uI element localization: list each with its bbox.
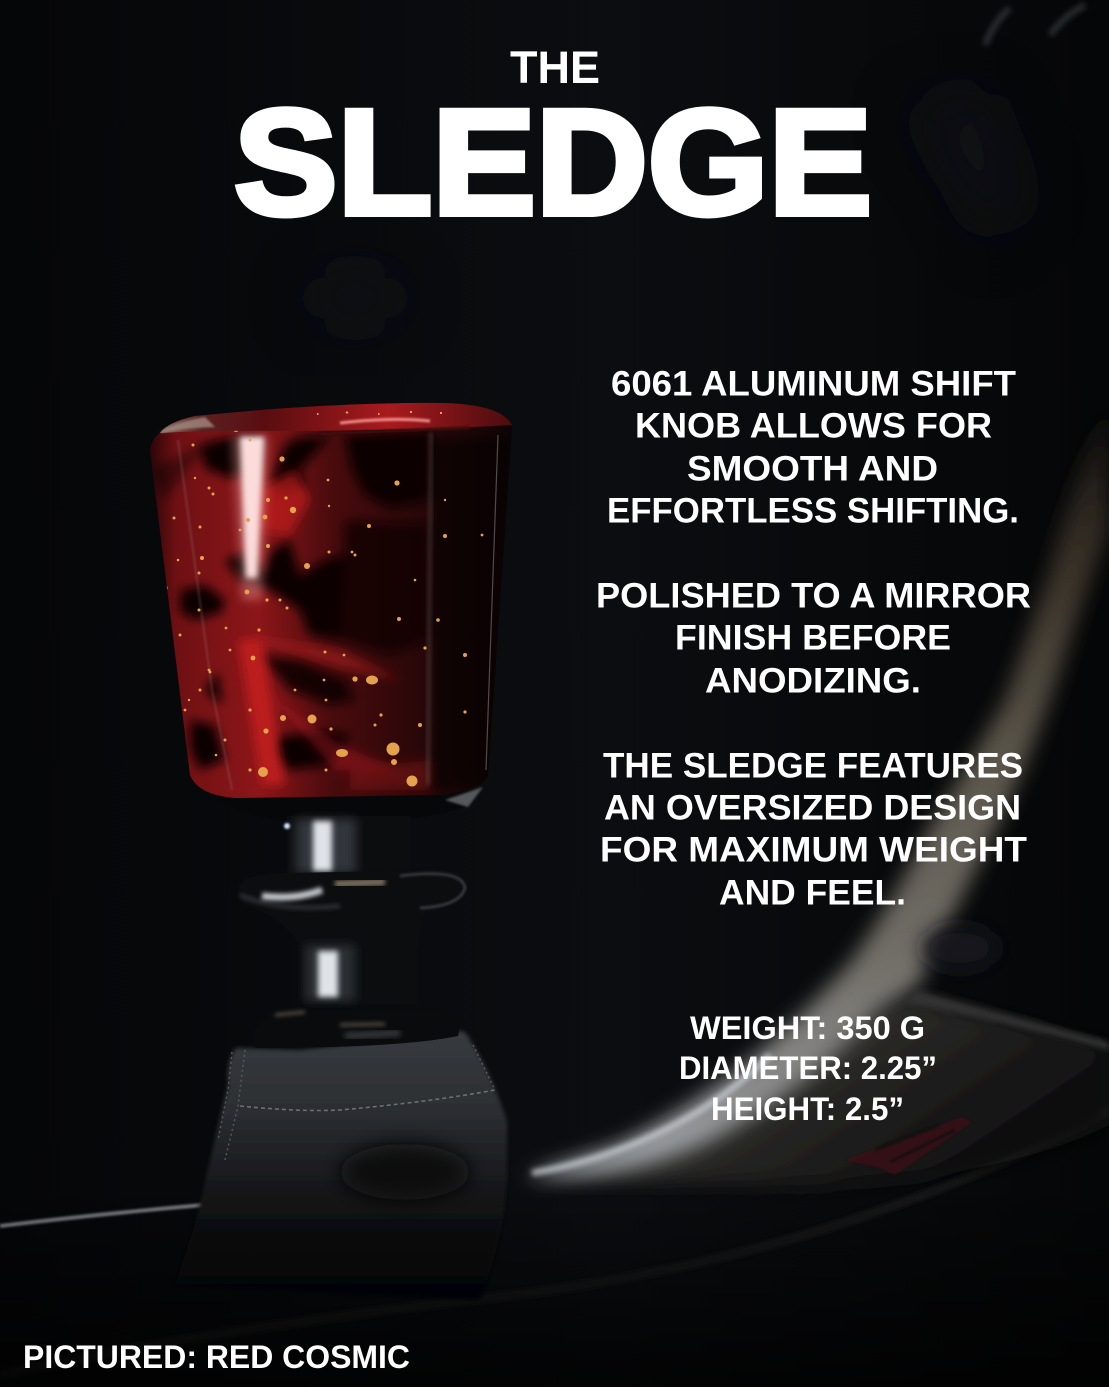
paragraph: finish: ANODIZING.	[705, 662, 921, 700]
paragraph: material: KNOB ALLOWS FOR	[635, 406, 992, 446]
dark marbling and highlights	[150, 426, 510, 790]
text block: specifications: HEIGHT: 2.5”	[711, 1091, 904, 1127]
paragraph: material: EFFORTLESS SHIFTING.	[607, 492, 1019, 530]
text block: specifications: DIAMETER: 2.25”	[679, 1050, 937, 1086]
metal shaft and collar	[205, 787, 483, 1048]
paragraph: design: AND FEEL.	[719, 874, 906, 912]
title	[234, 42, 872, 246]
red cosmic shift knob	[150, 403, 512, 798]
paragraph: finish: FINISH BEFORE	[675, 618, 951, 658]
paragraph: design: THE SLEDGE FEATURES	[603, 746, 1023, 786]
gold speckles	[162, 426, 483, 786]
caption: pictured colour: PICTURED: RED COSMIC	[23, 1339, 410, 1375]
paragraph: design: FOR MAXIMUM WEIGHT	[600, 830, 1027, 870]
text block: specifications	[679, 1010, 937, 1127]
steering wheel rim	[525, 408, 1109, 1185]
paragraph: material	[607, 364, 1019, 530]
paragraph: design: AN OVERSIZED DESIGN	[604, 788, 1021, 828]
paragraph: material: 6061 ALUMINUM SHIFT	[611, 364, 1016, 404]
paragraph: finish: POLISHED TO A MIRROR	[596, 576, 1031, 616]
text block: product description	[596, 364, 1031, 912]
title main word: SLEDGE	[234, 78, 872, 246]
shift boot	[175, 1031, 507, 1300]
paragraph: design	[600, 746, 1027, 912]
title kicker: THE	[510, 42, 600, 93]
bottom vignette	[0, 1180, 1109, 1387]
text block: specifications: WEIGHT: 350 G	[690, 1010, 925, 1046]
paragraph: material: SMOOTH AND	[687, 450, 938, 488]
paragraph: finish	[596, 576, 1031, 700]
red STI badge	[845, 1117, 972, 1175]
